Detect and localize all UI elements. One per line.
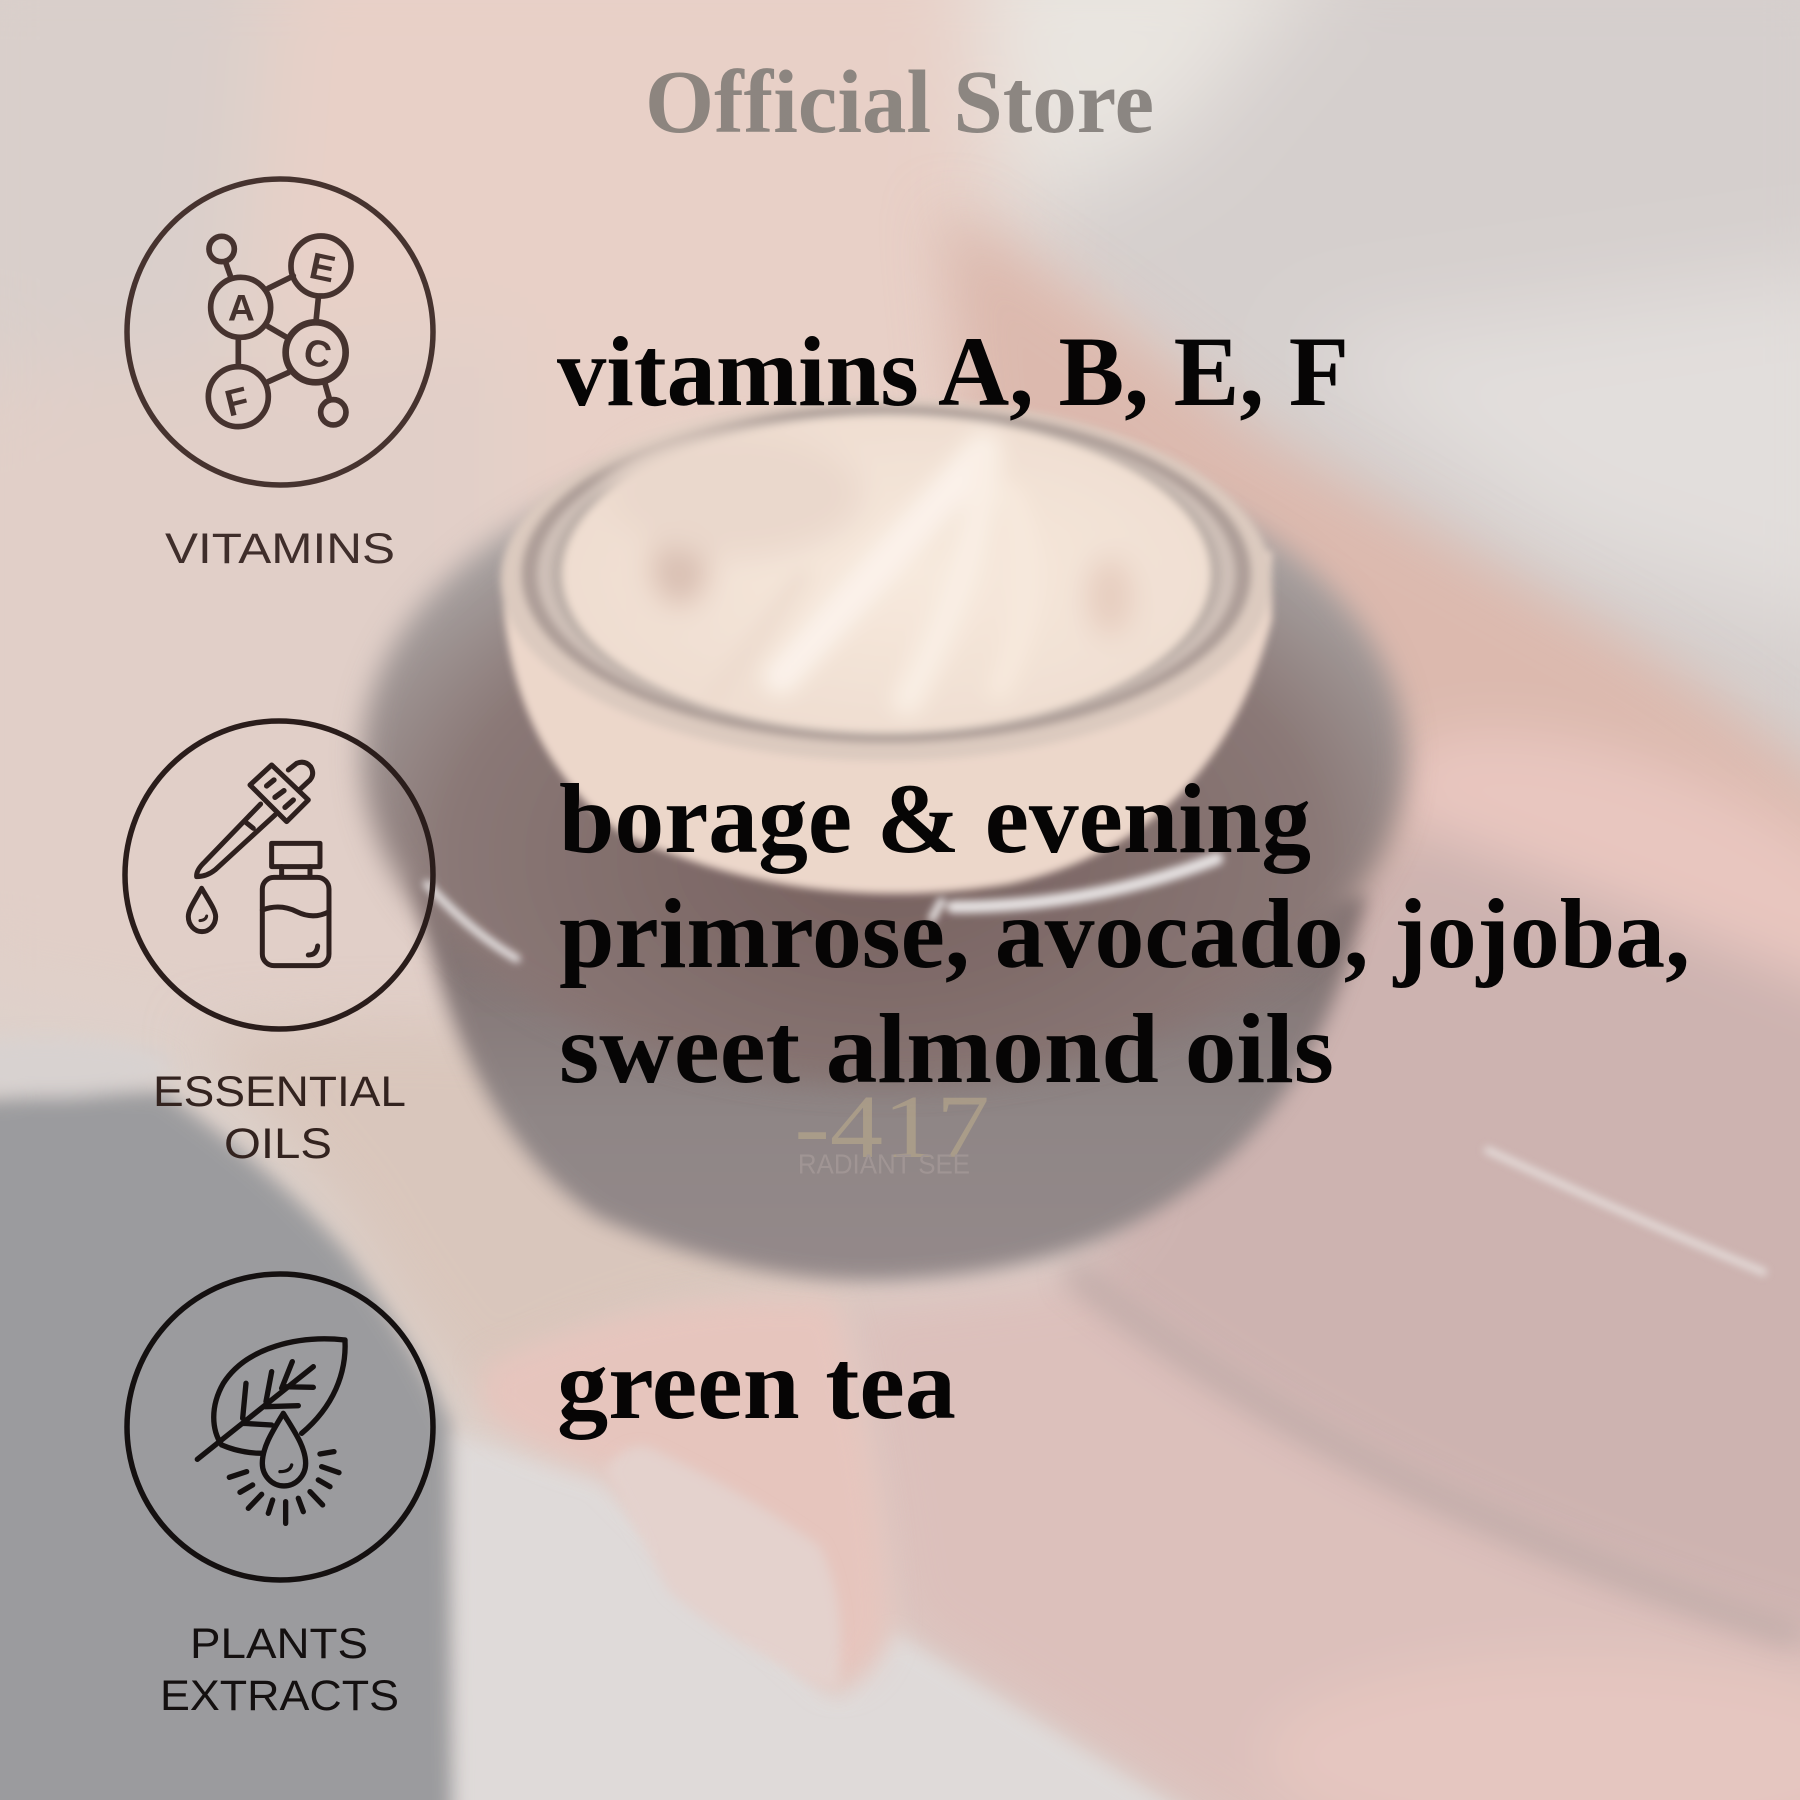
label: essential oils: ESSENTIAL [153,1068,406,1116]
icon: vitamins molecule [127,179,433,485]
jar label: -417 [794,1078,990,1177]
row: essential oils [125,721,1690,1168]
text: oils list: borage & evening [559,763,1311,874]
text: oils list: sweet almond oils [559,993,1334,1104]
icon: vitamins molecule: A [228,287,255,329]
label: essential oils [153,1068,406,1168]
icon: dropper and bottle [125,721,433,1029]
label: plants extracts [160,1620,399,1720]
label: essential oils: OILS [224,1120,332,1168]
text: oils list [559,763,1690,1104]
label: vitamins: VITAMINS [165,525,395,573]
icon: vitamins molecule: F [221,378,253,424]
title: Official Store [645,53,1154,152]
label: plants extracts: EXTRACTS [160,1672,399,1720]
icon: leaf and drop [127,1274,433,1580]
jar rim and cream [501,398,1272,894]
jar label: RADIANT SEE [798,1148,970,1179]
text: oils list: primrose, avocado, jojoba, [559,878,1690,989]
icon: vitamins molecule: C [300,330,335,377]
row: plants extracts [127,1274,956,1720]
text: vitamins list: vitamins A, B, E, F [557,316,1349,427]
text: plants list: green tea [557,1329,956,1440]
jar body [362,430,1406,1280]
row: vitamins [127,179,1349,573]
icon: vitamins molecule: E [306,244,339,290]
jar highlights [427,859,1763,1272]
label: plants extracts: PLANTS [190,1620,368,1668]
